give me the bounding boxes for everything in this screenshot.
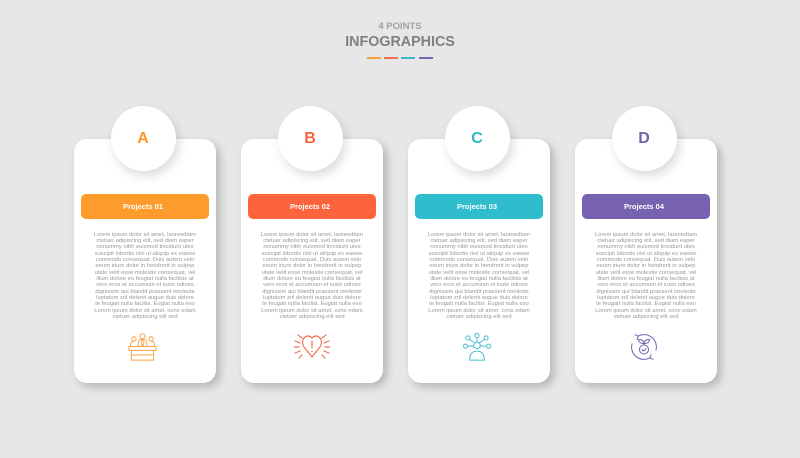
body text: card D: luptatum zril delenit augue duis dolore xyxy=(597,295,695,301)
label bar: projects 01: Projects 01 xyxy=(123,202,163,211)
panel: card A xyxy=(74,139,216,383)
label bar: projects 02: Projects 02 xyxy=(290,202,330,211)
body text: card C: illum dolore eu feugiat nulla facilisis at xyxy=(430,276,528,282)
body text: card D: dignissim qui blandit praesent imoleste xyxy=(596,289,696,295)
badge: B: B xyxy=(304,130,316,147)
body text: card B xyxy=(261,232,363,320)
badge: C: C xyxy=(471,130,483,147)
body text: card C: te feugait nulla facilisi. Eugiat nulla eso xyxy=(429,301,529,307)
badge: C xyxy=(444,106,510,171)
body text: card D: commodo consequat. Duis autem velo xyxy=(597,257,695,263)
body text: card A: ctetuer adipiscing elit sed xyxy=(112,314,178,320)
body text: card B: ctetuer adipiscing elit sed xyxy=(279,314,345,320)
body text: card A: dignissim qui blandit praesent imoleste xyxy=(95,289,195,295)
body text: card A: vero eros et accumsan et iusto odioes xyxy=(96,282,194,288)
body text: card C: Lorem ipsum dolor sit amet, cons edam xyxy=(428,308,530,314)
body text: card B: luptatum zril delenit augue duis dolore xyxy=(263,295,361,301)
body text: card B: vero eros et accumsan et iusto odioes xyxy=(263,282,361,288)
body text: card C: ctetuer adipiscing elit, sed diam eaper xyxy=(430,238,528,244)
icon: speaker at podium xyxy=(128,333,157,361)
body text: card A xyxy=(94,232,196,320)
body text: card A: Lorem ipsum dolor sit amet, cons edam xyxy=(94,308,196,314)
body text: card B: ctetuer adipiscing elit, sed diam eaper xyxy=(263,238,361,244)
badge: A xyxy=(110,106,176,171)
body text: card A: illum dolore eu feugiat nulla facilisis at xyxy=(96,276,194,282)
body text: card D: suscipit lobortis nisl ut aliquip ex eawse xyxy=(596,251,696,257)
body text: card A: ctetuer adipiscing elit, sed diam eaper xyxy=(96,238,194,244)
body text: card C xyxy=(428,232,530,320)
panel: card D xyxy=(575,139,717,383)
body text: card B: commodo consequat. Duis autem velo xyxy=(263,257,361,263)
body text: card B: nonummy nibh euismod tincidunt utes xyxy=(263,244,361,250)
body text: card B: illum dolore eu feugiat nulla facilisis at xyxy=(263,276,361,282)
title: infographics: INFOGRAPHICS xyxy=(345,34,455,50)
title underline dashes xyxy=(367,57,433,59)
body text: card B: dignissim qui blandit praesent imoleste xyxy=(262,289,362,295)
badge: A: A xyxy=(137,130,149,147)
body text: card C: luptatum zril delenit augue duis dolore xyxy=(430,295,528,301)
body text: card C: ctetuer adipiscing elit sed xyxy=(446,314,512,320)
badge: D xyxy=(612,106,676,171)
panel: card C xyxy=(408,139,550,383)
body text: card D: Lorem ipsum dolor sit amet, cons edam xyxy=(595,308,697,314)
body text: card C: nonummy nibh euismod tincidunt utes xyxy=(430,244,528,250)
badge: B xyxy=(278,106,342,171)
body text: card B: Lorem ipsum dolor sit amet, cons edam xyxy=(261,308,363,314)
badge: D: D xyxy=(638,130,650,147)
label bar: projects 02 xyxy=(248,194,376,219)
body text: card C: suscipit lobortis nisl ut aliquip ex eawse xyxy=(429,251,529,257)
body text: card C: utate velit esse molestie consequat, vel xyxy=(429,270,529,276)
body text: card A: suscipit lobortis nisl ut aliquip ex eawse xyxy=(95,251,195,257)
label bar: projects 04 xyxy=(582,194,710,219)
panel: card B xyxy=(241,139,383,383)
body text: card A: utate velit esse molestie consequat, vel xyxy=(95,270,195,276)
body text: card C: vero eros et accumsan et iusto odioes xyxy=(430,282,528,288)
body text: card A: luptatum zril delenit augue duis dolore xyxy=(96,295,194,301)
icon: plant in recycle circle xyxy=(631,334,657,360)
body text: card A: eeum iriure dolor in hendrerit in vulpep xyxy=(96,263,194,269)
body text: card B: te feugait nulla facilisi. Eugiat nulla eso xyxy=(262,301,362,307)
body text: card B: utate velit esse molestie consequat, vel xyxy=(262,270,362,276)
icon: person with network nodes xyxy=(463,333,491,361)
title: 4 points: 4 POINTS xyxy=(378,20,422,32)
body text: card D: ctetuer adipiscing elit sed xyxy=(613,314,679,320)
body text: card C: dignissim qui blandit praesent imoleste xyxy=(429,289,529,295)
body text: card A: nonummy nibh euismod tincidunt utes xyxy=(96,244,194,250)
body text: card D: nonummy nibh euismod tincidunt utes xyxy=(597,244,695,250)
body text: card A: te feugait nulla facilisi. Eugiat nulla eso xyxy=(95,301,195,307)
label bar: projects 04: Projects 04 xyxy=(624,202,664,211)
body text: card D: illum dolore eu feugiat nulla facilisis at xyxy=(597,276,695,282)
body text: card B: eeum iriure dolor in hendrerit in vulpep xyxy=(263,263,361,269)
body text: card D: utate velit esse molestie consequat, vel xyxy=(596,270,696,276)
label bar: projects 01 xyxy=(81,194,209,219)
body text: card A: commodo consequat. Duis autem velo xyxy=(96,257,194,263)
body text: card B: Lorem ipsum dolor sit amet, laoreedtam xyxy=(261,232,363,238)
body text: card D xyxy=(595,232,697,320)
body text: card A: Lorem ipsum dolor sit amet, laoreedtam xyxy=(94,232,196,238)
body text: card C: Lorem ipsum dolor sit amet, laoreedtam xyxy=(428,232,530,238)
body text: card D: ctetuer adipiscing elit, sed diam eaper xyxy=(597,238,695,244)
icon: heart with alert rays xyxy=(294,334,330,359)
body text: card D: Lorem ipsum dolor sit amet, laoreedtam xyxy=(595,232,697,238)
body text: card D: eeum iriure dolor in hendrerit in vulpep xyxy=(597,263,695,269)
label bar: projects 03 xyxy=(415,194,543,219)
body text: card B: suscipit lobortis nisl ut aliquip ex eawse xyxy=(262,251,362,257)
body text: card C: eeum iriure dolor in hendrerit in vulpep xyxy=(430,263,528,269)
body text: card D: vero eros et accumsan et iusto odioes xyxy=(597,282,695,288)
label bar: projects 03: Projects 03 xyxy=(457,202,497,211)
body text: card D: te feugait nulla facilisi. Eugiat nulla eso xyxy=(596,301,696,307)
body text: card C: commodo consequat. Duis autem velo xyxy=(430,257,528,263)
